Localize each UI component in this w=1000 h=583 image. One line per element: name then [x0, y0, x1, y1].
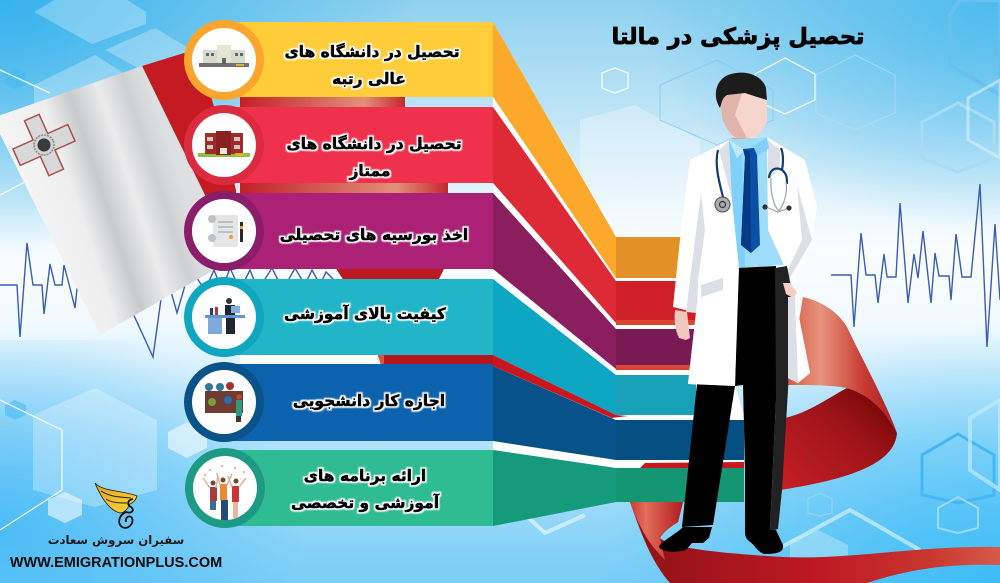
icon: scroll and pen	[208, 215, 243, 247]
upper ribbon loop	[780, 297, 897, 490]
necktie	[741, 148, 760, 253]
label: اجازه کار دانشجویی	[293, 392, 445, 410]
doctor figure	[659, 73, 817, 554]
shoes	[659, 527, 712, 552]
icon: teacher at desk	[205, 298, 245, 334]
title: تحصیل پزشکی در مالتا	[612, 24, 864, 50]
label: اخذ بورسیه های تحصیلی	[280, 226, 468, 244]
red ribbon strips behind banners	[142, 53, 493, 366]
label: ارائه برنامه های	[304, 467, 426, 485]
icon: students in classroom	[205, 382, 243, 422]
banner 6: green: آموزشی و تخصصی	[291, 493, 440, 512]
label: تحصیل در دانشگاه های	[284, 42, 460, 61]
Malta flag	[0, 66, 235, 335]
company name: سفیران سروش سعادت	[48, 533, 184, 548]
George Cross emblem	[4, 105, 84, 185]
lower ribbon	[630, 502, 1000, 583]
banner 2: red: ممتاز	[348, 162, 391, 180]
banner side panels	[493, 22, 744, 526]
banner 4: teal	[184, 277, 493, 357]
ECG line right	[831, 184, 1000, 347]
coat shading	[686, 140, 812, 313]
banner 3: purple	[184, 191, 493, 271]
trousers	[659, 266, 793, 554]
shirt	[729, 137, 784, 268]
ECG line left	[0, 243, 334, 357]
banner 6: green	[185, 448, 493, 528]
logo	[10, 483, 222, 571]
banner 1: yellow	[184, 20, 493, 100]
banner 1: yellow: عالی رتبه	[332, 70, 406, 88]
icon: red brick building	[198, 131, 250, 157]
lab coat	[673, 137, 817, 386]
banner 2: red	[184, 105, 493, 185]
hands	[675, 310, 690, 340]
label: تحصیل در دانشگاه های	[286, 134, 462, 153]
hexagon accents	[520, 0, 1000, 550]
hair and face	[716, 73, 767, 148]
icon circle	[184, 20, 264, 100]
banner 5: blue	[184, 362, 493, 442]
icon: winged emblem	[95, 483, 137, 528]
coat front over trousers	[688, 268, 739, 386]
icon: celebrating people	[203, 465, 246, 520]
label: کیفیت بالای آموزشی	[284, 304, 447, 323]
website: WWW.EMIGRATIONPLUS.COM	[10, 555, 222, 571]
icon: university building	[199, 45, 249, 67]
stethoscope	[715, 148, 792, 212]
